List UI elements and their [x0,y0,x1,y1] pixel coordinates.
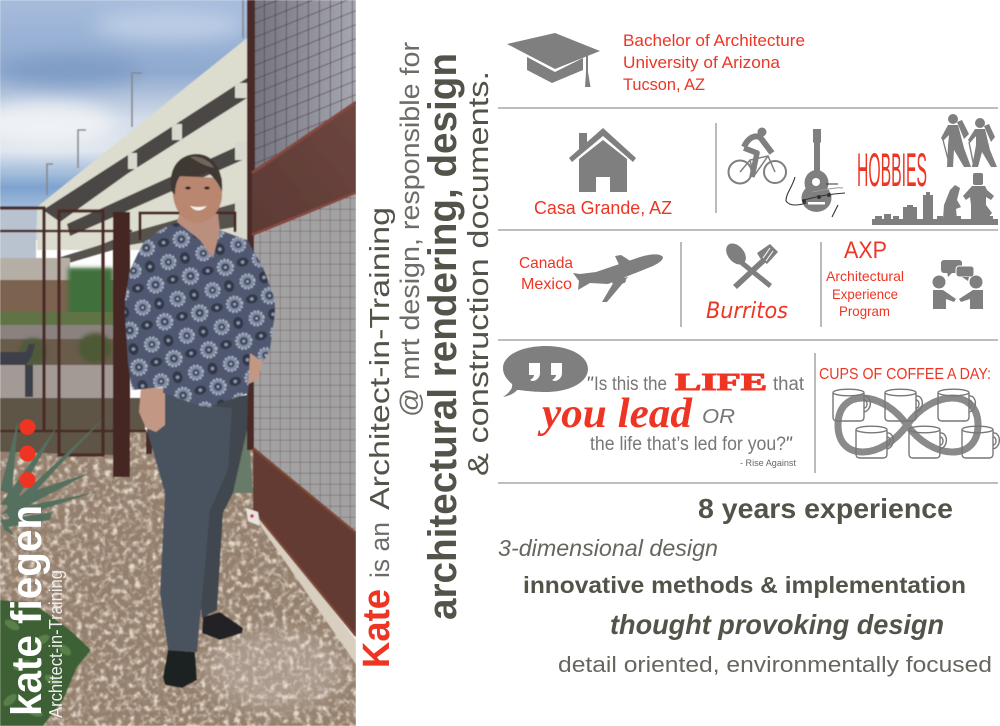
Kate is an Architect-in-Training: Kate [356,589,398,668]
travel text: Canada [519,255,573,272]
education text: University of Arizona [623,54,781,72]
red dots [20,419,36,488]
icon: house [569,128,636,192]
icon: airplane [573,254,663,302]
section dividers [498,108,998,483]
head [173,176,222,223]
at mrt design: @ mrt design, responsible for [395,42,425,417]
quote: you lead [537,391,693,437]
hands [139,352,263,432]
quote: " [785,434,793,455]
construction documents: & construction documents. [463,71,495,476]
icon: infinity of coffee cups [833,389,999,458]
AXP text: Architectural [826,268,904,284]
quote: LIFE [675,370,767,396]
sky [0,0,250,240]
quote: the life that’s led for you? [590,434,786,455]
skills list: thought provoking design [610,609,944,640]
favorite food: Burritos [706,299,788,324]
quote: " [586,374,594,395]
quote: - Rise Against [740,458,796,469]
quote: that [773,374,805,395]
plant behind trousers [233,423,253,493]
quote: Is this the [594,374,667,395]
icon: people meeting [932,260,983,309]
background garden behind fence [0,210,36,258]
photo: Kate standing outdoors [0,0,356,726]
travel text: Mexico [521,276,572,293]
skills list: detail oriented, environmentally focused [558,652,992,677]
role: Architect-in-Training: Architect-in-Training [46,570,66,718]
icon: guitar with music [786,129,845,217]
AXP text: Program [839,303,890,319]
travel text [519,255,573,293]
neck [177,212,220,258]
shrub [0,600,91,726]
icon: spoon and fork [722,240,778,289]
rotated intro text [356,42,495,668]
boots [163,650,197,688]
icon: graduation cap [507,33,600,87]
quote [537,370,805,469]
hometown: Casa Grande, AZ [534,198,672,218]
education text [623,32,805,94]
skills list: 8 years experience [698,493,953,524]
gravel ground [0,430,356,726]
AXP text: Experience [832,286,898,302]
skills list: 3-dimensional design [498,535,718,561]
AXP text: AXP [844,237,887,264]
blouse [125,222,275,408]
quote: OR [702,406,735,428]
AXP text [826,237,904,319]
icon: lego figures and bricks [872,173,998,225]
fence frames and post [0,208,103,455]
rotated intro text: Architect-in-Training [364,207,395,510]
trousers [200,394,248,618]
rotated intro text: is an [365,522,395,578]
name: kate fiegen: kate fiegen [3,505,51,716]
education text: Tucson, AZ [623,76,705,94]
skills list [498,493,992,677]
right wall [254,0,356,180]
icon: quote bubble [503,346,588,397]
parking structure [37,38,247,250]
education text: Bachelor of Architecture [623,32,805,50]
concrete curb [252,505,356,664]
agave [0,418,104,536]
icon: hikers [941,114,997,167]
architectural rendering, design: architectural rendering, design [421,53,465,620]
icon: cyclist [728,128,786,184]
skills list: innovative methods & implementation [523,572,966,598]
